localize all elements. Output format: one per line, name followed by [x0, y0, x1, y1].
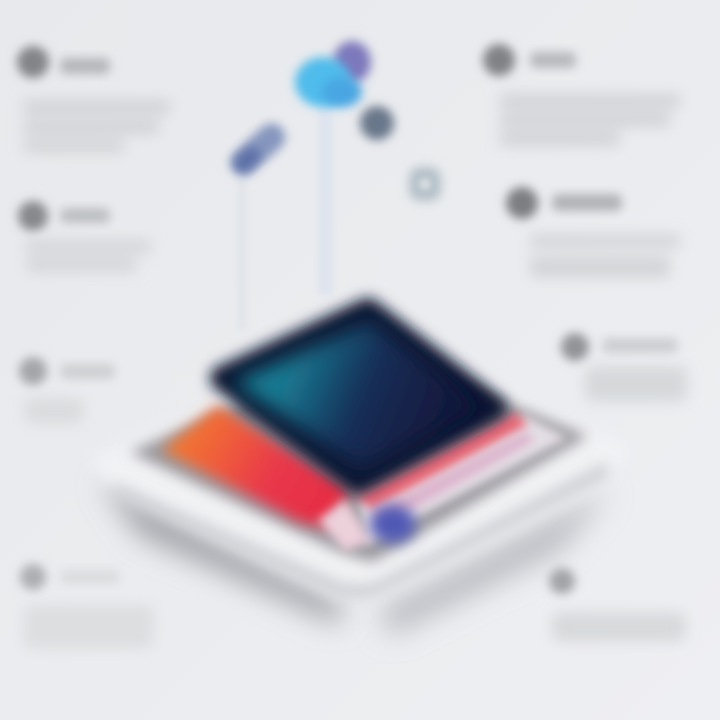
panel: middle left callout: [18, 201, 151, 272]
pink corner: [318, 500, 372, 552]
device base edge: [112, 462, 610, 598]
purple strip: [372, 432, 535, 525]
panel: middle right callout: [506, 187, 680, 278]
icon: gray node: [360, 106, 394, 140]
device base: [90, 330, 632, 598]
text block: lower right: [585, 366, 687, 402]
icon: small teal node: [409, 167, 441, 201]
icon: top left badge: [17, 46, 49, 78]
heading: lower left: [60, 364, 115, 379]
device shadow: [100, 480, 340, 625]
text block: bottom right: [552, 612, 686, 642]
icon: middle left badge: [18, 201, 48, 231]
light page under screen: [360, 415, 568, 545]
device tray: [130, 345, 588, 562]
icon: lower right badge: [561, 333, 589, 361]
heading: lower right: [602, 338, 678, 353]
icon: top right badge: [483, 44, 515, 76]
text block: bottom left: [24, 605, 154, 649]
heading: middle left: [60, 208, 110, 223]
icon: blue capsule: [225, 118, 290, 181]
connector lines: [237, 105, 333, 330]
panel: bottom left callout: [20, 564, 154, 649]
icon: bottom left badge: [20, 564, 46, 590]
icon: bottom right badge: [549, 568, 575, 594]
panel: top left callout: [17, 46, 170, 152]
text block: middle left: [26, 240, 151, 272]
panel: top right callout: [483, 44, 680, 146]
panel: warm colour layer: [162, 405, 350, 528]
device right shadow: [380, 490, 610, 635]
text block: top right: [500, 94, 680, 146]
dark screen bezel: [222, 310, 495, 482]
icon: lower left badge: [19, 357, 47, 385]
heading: bottom left: [60, 570, 120, 584]
panel: lower right callout: [561, 333, 687, 402]
icon: blue circle on device: [370, 505, 416, 543]
text block: middle right: [530, 234, 680, 278]
device illustration: [90, 310, 632, 635]
icon: middle right badge: [506, 187, 538, 219]
panel: lower left callout: [19, 357, 115, 424]
heading: top right: [530, 52, 576, 68]
text block: lower left: [24, 398, 84, 424]
heading: top left: [60, 58, 110, 74]
heading: middle right: [552, 194, 622, 211]
screen surface: [234, 322, 480, 468]
panel: bottom right callout: [549, 568, 686, 642]
red strip: [355, 412, 528, 510]
icon: cloud: [295, 41, 371, 107]
text block: top left: [24, 100, 170, 152]
